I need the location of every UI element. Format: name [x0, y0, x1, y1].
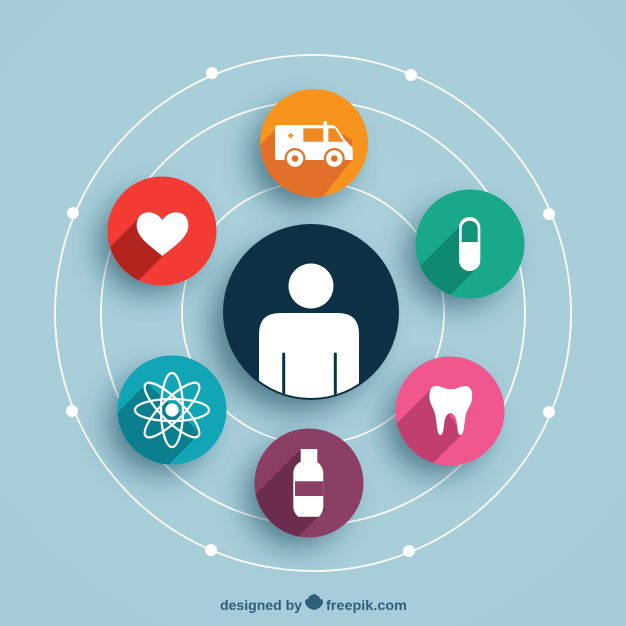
icon: ambulance	[275, 121, 353, 169]
soft drop shadows	[99, 106, 507, 546]
icon: heart	[137, 212, 188, 256]
orange ambulance badge	[260, 89, 368, 197]
credit text: designed by	[220, 597, 302, 613]
teal atom badge	[118, 356, 226, 464]
icon: pill	[459, 217, 480, 271]
icon: freepik logo	[305, 594, 323, 610]
icon: tooth	[429, 386, 472, 435]
purple bottle badge	[254, 428, 364, 538]
pink tooth badge	[396, 356, 504, 466]
center person badge	[223, 224, 399, 410]
infographic canvas	[54, 54, 572, 613]
freepik credit	[220, 594, 407, 613]
person icon	[259, 264, 359, 410]
icon: atom	[135, 373, 209, 447]
brand text: freepik.com	[326, 597, 407, 613]
concentric rings with dots	[55, 55, 571, 571]
red heart badge	[108, 176, 216, 286]
green pill badge	[416, 190, 524, 298]
icon: bottle	[293, 449, 323, 517]
